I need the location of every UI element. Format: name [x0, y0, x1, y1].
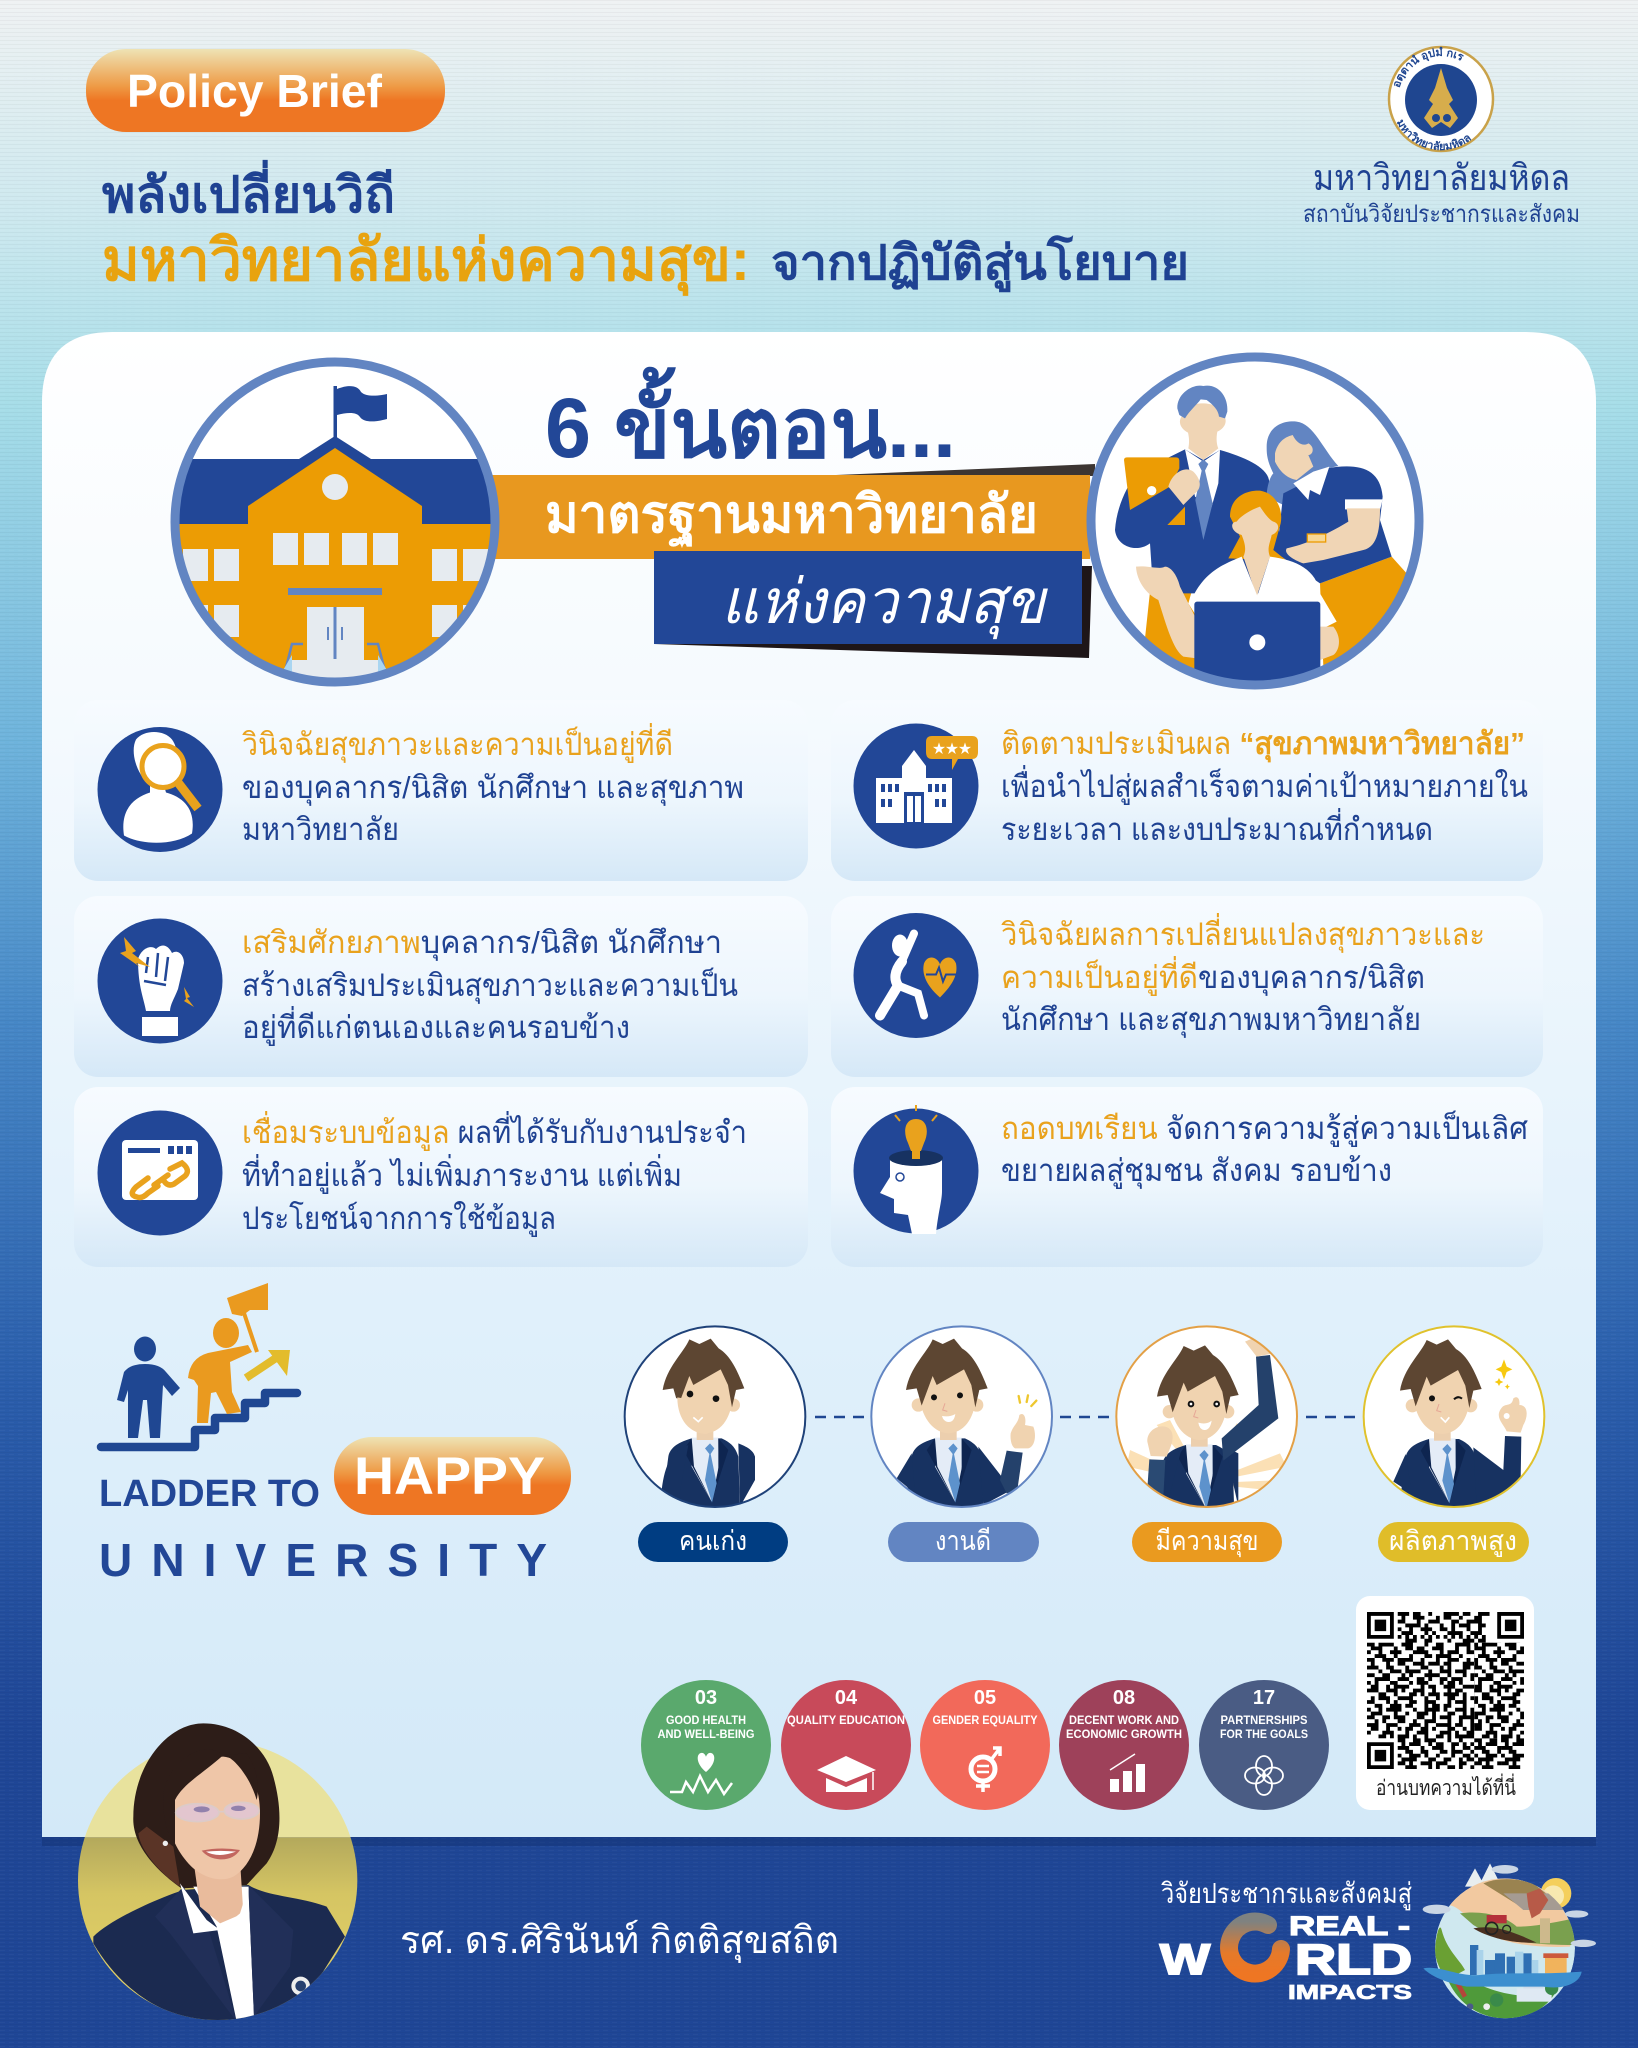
- character: happy: [1116, 1326, 1297, 1514]
- step card 5: diagnose change: [831, 896, 1543, 1077]
- icon: browser with chain link: [98, 1110, 222, 1236]
- text: step 3: เชื่อมระบบข้อมูล ผลที่ได้รับกับงานประจำ: [242, 1111, 747, 1151]
- label: good job: งานดี: [935, 1526, 991, 1556]
- logo: Real-World Impacts: วิจัยประชากรและสังคมสู่: [1161, 1878, 1412, 1911]
- badge: SDG 17: PARTNERSHIPS: [1220, 1715, 1308, 1727]
- step card 4: monitor and evaluate: [831, 700, 1543, 881]
- logo: Mahidol University seal: [1388, 46, 1494, 152]
- text: step 2: สร้างเสริมประเมินสุขภาวะและความเป็น: [242, 967, 738, 1005]
- portrait: author photo: [78, 1723, 357, 2022]
- label: happiness: มีความสุข: [1156, 1526, 1258, 1558]
- heading: main title: พลังเปลี่ยนวิถี: [102, 160, 395, 223]
- text: step 2: เสริมศักยภาพบุคลากร/นิสิต นักศึกษา: [242, 925, 722, 962]
- badge: SDG 8: 08: [1113, 1687, 1135, 1709]
- logo: Mahidol University seal: อตฺตานํ อุปมํ กเร: [1394, 46, 1464, 88]
- badge: SDG 4: [781, 1680, 911, 1810]
- badge: SDG 4: 04: [835, 1687, 858, 1709]
- text: step 4: [1001, 726, 1528, 847]
- connector dashes: [815, 1416, 1362, 1418]
- text: step 6: [1001, 1110, 1528, 1190]
- illustration: university building in circle: [170, 362, 500, 694]
- text: step 5: ความเป็นอยู่ที่ดีของบุคลากร/นิสิต: [1001, 956, 1425, 997]
- main white panel: [42, 332, 1596, 1846]
- illustration: world globe of communities: [1423, 1863, 1596, 2018]
- label: productivity: [1378, 1522, 1529, 1562]
- logo: Real-World Impacts: REAL -: [1289, 1911, 1410, 1941]
- text: step 3: [242, 1111, 747, 1237]
- logo: Mahidol University seal: มหาวิทยาลัยมหิดล: [1397, 120, 1472, 150]
- badge: SDG 5: 05: [974, 1687, 996, 1709]
- tag: Policy Brief: Policy Brief: [127, 65, 383, 117]
- logo: Real-World Impacts: IMPACTS: [1288, 1982, 1412, 2004]
- badge: SDG 3: AND WELL-BEING: [658, 1729, 755, 1741]
- text: university name: [1303, 157, 1580, 228]
- label: talented: [638, 1522, 788, 1562]
- badge: SDG 5: [920, 1680, 1050, 1810]
- text: step 5: นักศึกษา และสุขภาพมหาวิทยาลัย: [1001, 1002, 1421, 1039]
- character: good work: [871, 1326, 1052, 1507]
- badge: SDG 4: QUALITY EDUCATION: [787, 1715, 905, 1727]
- character: talented person: [625, 1326, 805, 1510]
- logo: Real-World Impacts: [1160, 1878, 1412, 2004]
- text: step 2: อยู่ที่ดีแก่ตนเองและคนรอบข้าง: [242, 1006, 630, 1046]
- step card 6: lessons learned: [831, 1087, 1543, 1267]
- icon: rated university building: ★★★: [932, 741, 972, 756]
- text: step 2: [242, 925, 738, 1046]
- step card 3: connect data: [74, 1087, 808, 1267]
- text: step 6: ขยายผลสู่ชุมชน สังคม รอบข้าง: [1001, 1153, 1392, 1190]
- badge: SDG 3: [641, 1680, 771, 1810]
- icon: person with magnifier: [98, 727, 222, 852]
- heading banner: 6 steps: 6 ขั้นตอน...: [545, 366, 956, 475]
- badge: SDG 17: [1199, 1680, 1329, 1810]
- badge: SDG 17: FOR THE GOALS: [1220, 1729, 1308, 1741]
- label: happiness: [1132, 1522, 1282, 1562]
- illustration: staff and students in circle: [1091, 357, 1419, 698]
- text: step 1: ของบุคลากร/นิสิต นักศึกษา และสุขภาพ: [242, 770, 744, 807]
- wordmark: Ladder to Happy University: HAPPY: [354, 1447, 545, 1506]
- text: step 5: [1000, 913, 1485, 1039]
- icon: rated university building: [854, 724, 978, 848]
- text: step 1: วินิจฉัยสุขภาวะและความเป็นอยู่ที่ดี: [241, 723, 673, 764]
- badge: SDG 3: 03: [695, 1687, 717, 1709]
- logo: Real-World Impacts: RLD: [1295, 1936, 1412, 1984]
- wordmark: Ladder to Happy University: [99, 1437, 571, 1586]
- heading banner: 6 steps: แห่งความสุข: [721, 568, 1048, 640]
- text: step 3: ประโยชน์จากการใช้ข้อมูล: [242, 1201, 556, 1237]
- heading: main title: มหาวิทยาลัยแห่งความสุข:: [102, 228, 750, 297]
- label: talented: คนเก่ง: [679, 1526, 747, 1556]
- label: good job: [888, 1522, 1039, 1562]
- step card 2: empower: [74, 896, 808, 1077]
- icon: people climbing stairs with flag: [101, 1283, 297, 1447]
- heading banner: 6 steps: มาตรฐานมหาวิทยาลัย: [545, 486, 1038, 548]
- text: university name: สถาบันวิจัยประชากรและสังคม: [1303, 201, 1580, 228]
- QR code: [1367, 1612, 1524, 1769]
- heading banner: 6 steps: [490, 366, 1095, 658]
- badge: SDG 5: GENDER EQUALITY: [932, 1715, 1038, 1727]
- icon: runner with heart: [854, 913, 978, 1038]
- character: high productivity: [1364, 1326, 1544, 1508]
- text: university name: มหาวิทยาลัยมหิดล: [1313, 157, 1570, 198]
- icon: raised fist with lightning: [98, 918, 222, 1044]
- text: step 4: เพื่อนำไปสู่ผลสำเร็จตามค่าเป้าหมายภายใน: [1001, 765, 1528, 805]
- label: productivity: ผลิตภาพสูง: [1389, 1526, 1517, 1557]
- heading: main title: จากปฏิบัติสู่นโยบาย: [771, 234, 1189, 293]
- logo: Real-World Impacts: W: [1160, 1936, 1211, 1984]
- badge: SDG 17: 17: [1253, 1687, 1275, 1709]
- badge: SDG 8: ECONOMIC GROWTH: [1066, 1729, 1182, 1741]
- text: author name: รศ. ดร.ศิรินันท์ กิตติสุขสถิต: [400, 1919, 839, 1963]
- heading: main title: [102, 160, 1189, 297]
- text: step 1: [241, 723, 744, 847]
- text: step 4: ระยะเวลา และงบประมาณที่กำหนด: [1001, 808, 1433, 847]
- text: step 3: ที่ทำอยู่แล้ว ไม่เพิ่มภาระงาน แต่เพิ่ม: [242, 1154, 682, 1194]
- text: step 1: มหาวิทยาลัย: [242, 812, 399, 847]
- badge: SDG 8: DECENT WORK AND: [1069, 1715, 1179, 1727]
- icon: head with light bulb: [854, 1105, 978, 1234]
- wordmark: Ladder to Happy University: LADDER TO: [99, 1473, 320, 1515]
- text: step 5: วินิจฉัยผลการเปลี่ยนแปลงสุขภาวะและ: [1000, 913, 1485, 954]
- text: step 4: ติดตามประเมินผล “สุขภาพมหาวิทยาลัย”: [1001, 726, 1525, 763]
- text: step 6: ถอดบทเรียน จัดการความรู้สู่ความเป็นเลิศ: [1001, 1110, 1528, 1147]
- badge: SDG 8: [1059, 1680, 1189, 1810]
- tag: Policy Brief: [86, 49, 445, 132]
- step card 1: diagnose: [74, 700, 808, 881]
- QR code card: [1356, 1596, 1534, 1810]
- QR code card: อ่านบทความได้ที่นี่: [1376, 1773, 1516, 1800]
- wordmark: Ladder to Happy University: UNIVERSITY: [99, 1534, 547, 1586]
- badge: SDG 3: GOOD HEALTH: [666, 1715, 746, 1727]
